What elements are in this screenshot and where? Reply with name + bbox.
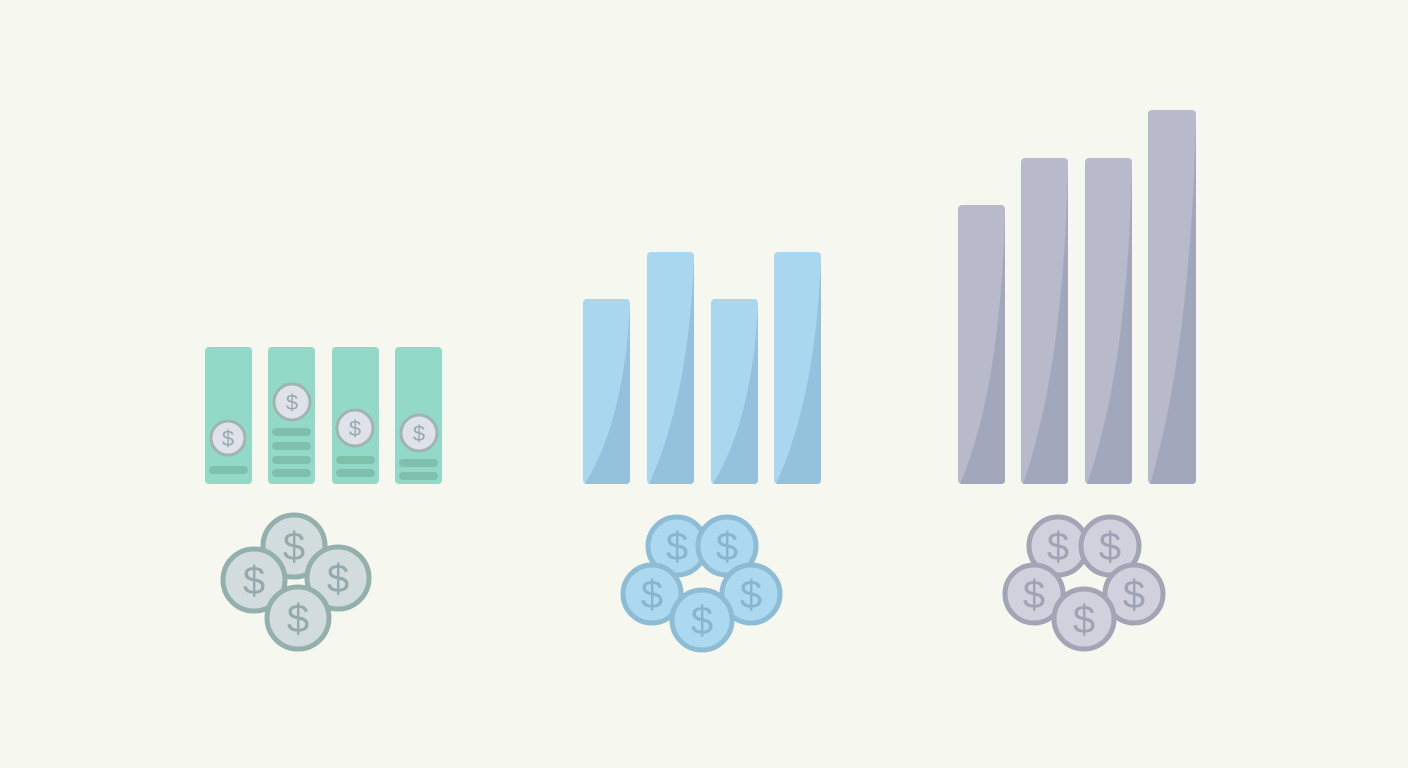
icon: gray coin cluster: $ [1073,598,1095,642]
icon: gray coin cluster [1005,517,1163,649]
panel: gray bars [958,110,1196,484]
icon: blue coin cluster: $ [716,525,738,569]
bar 3 [332,347,379,484]
bar 4 [395,347,442,484]
icon: green coin cluster: $ [327,557,349,601]
icon: green coin cluster: $ [243,559,265,603]
icon: gray coin cluster: $ [1123,573,1145,617]
icon: blue coin cluster: $ [740,573,762,617]
icon: green coin cluster [223,515,369,649]
icon: blue coin cluster: $ [641,573,663,617]
icon: gray coin cluster: $ [1099,525,1121,569]
icon: gray coin cluster: $ [1047,525,1069,569]
icon: blue coin cluster [623,517,780,650]
bar 1: $ [222,426,234,451]
panel: blue bars [583,252,821,484]
icon: green coin cluster: $ [287,597,309,641]
panel: green bars [205,347,442,484]
bar 2 [268,347,315,484]
bar 3: $ [349,416,361,441]
icon: green coin cluster: $ [283,525,305,569]
bar 2: $ [286,390,298,415]
icon: blue coin cluster: $ [666,525,688,569]
icon: gray coin cluster: $ [1023,573,1045,617]
icon: blue coin cluster: $ [691,599,713,643]
bar 4: $ [413,421,425,446]
bar 1 [205,347,252,484]
